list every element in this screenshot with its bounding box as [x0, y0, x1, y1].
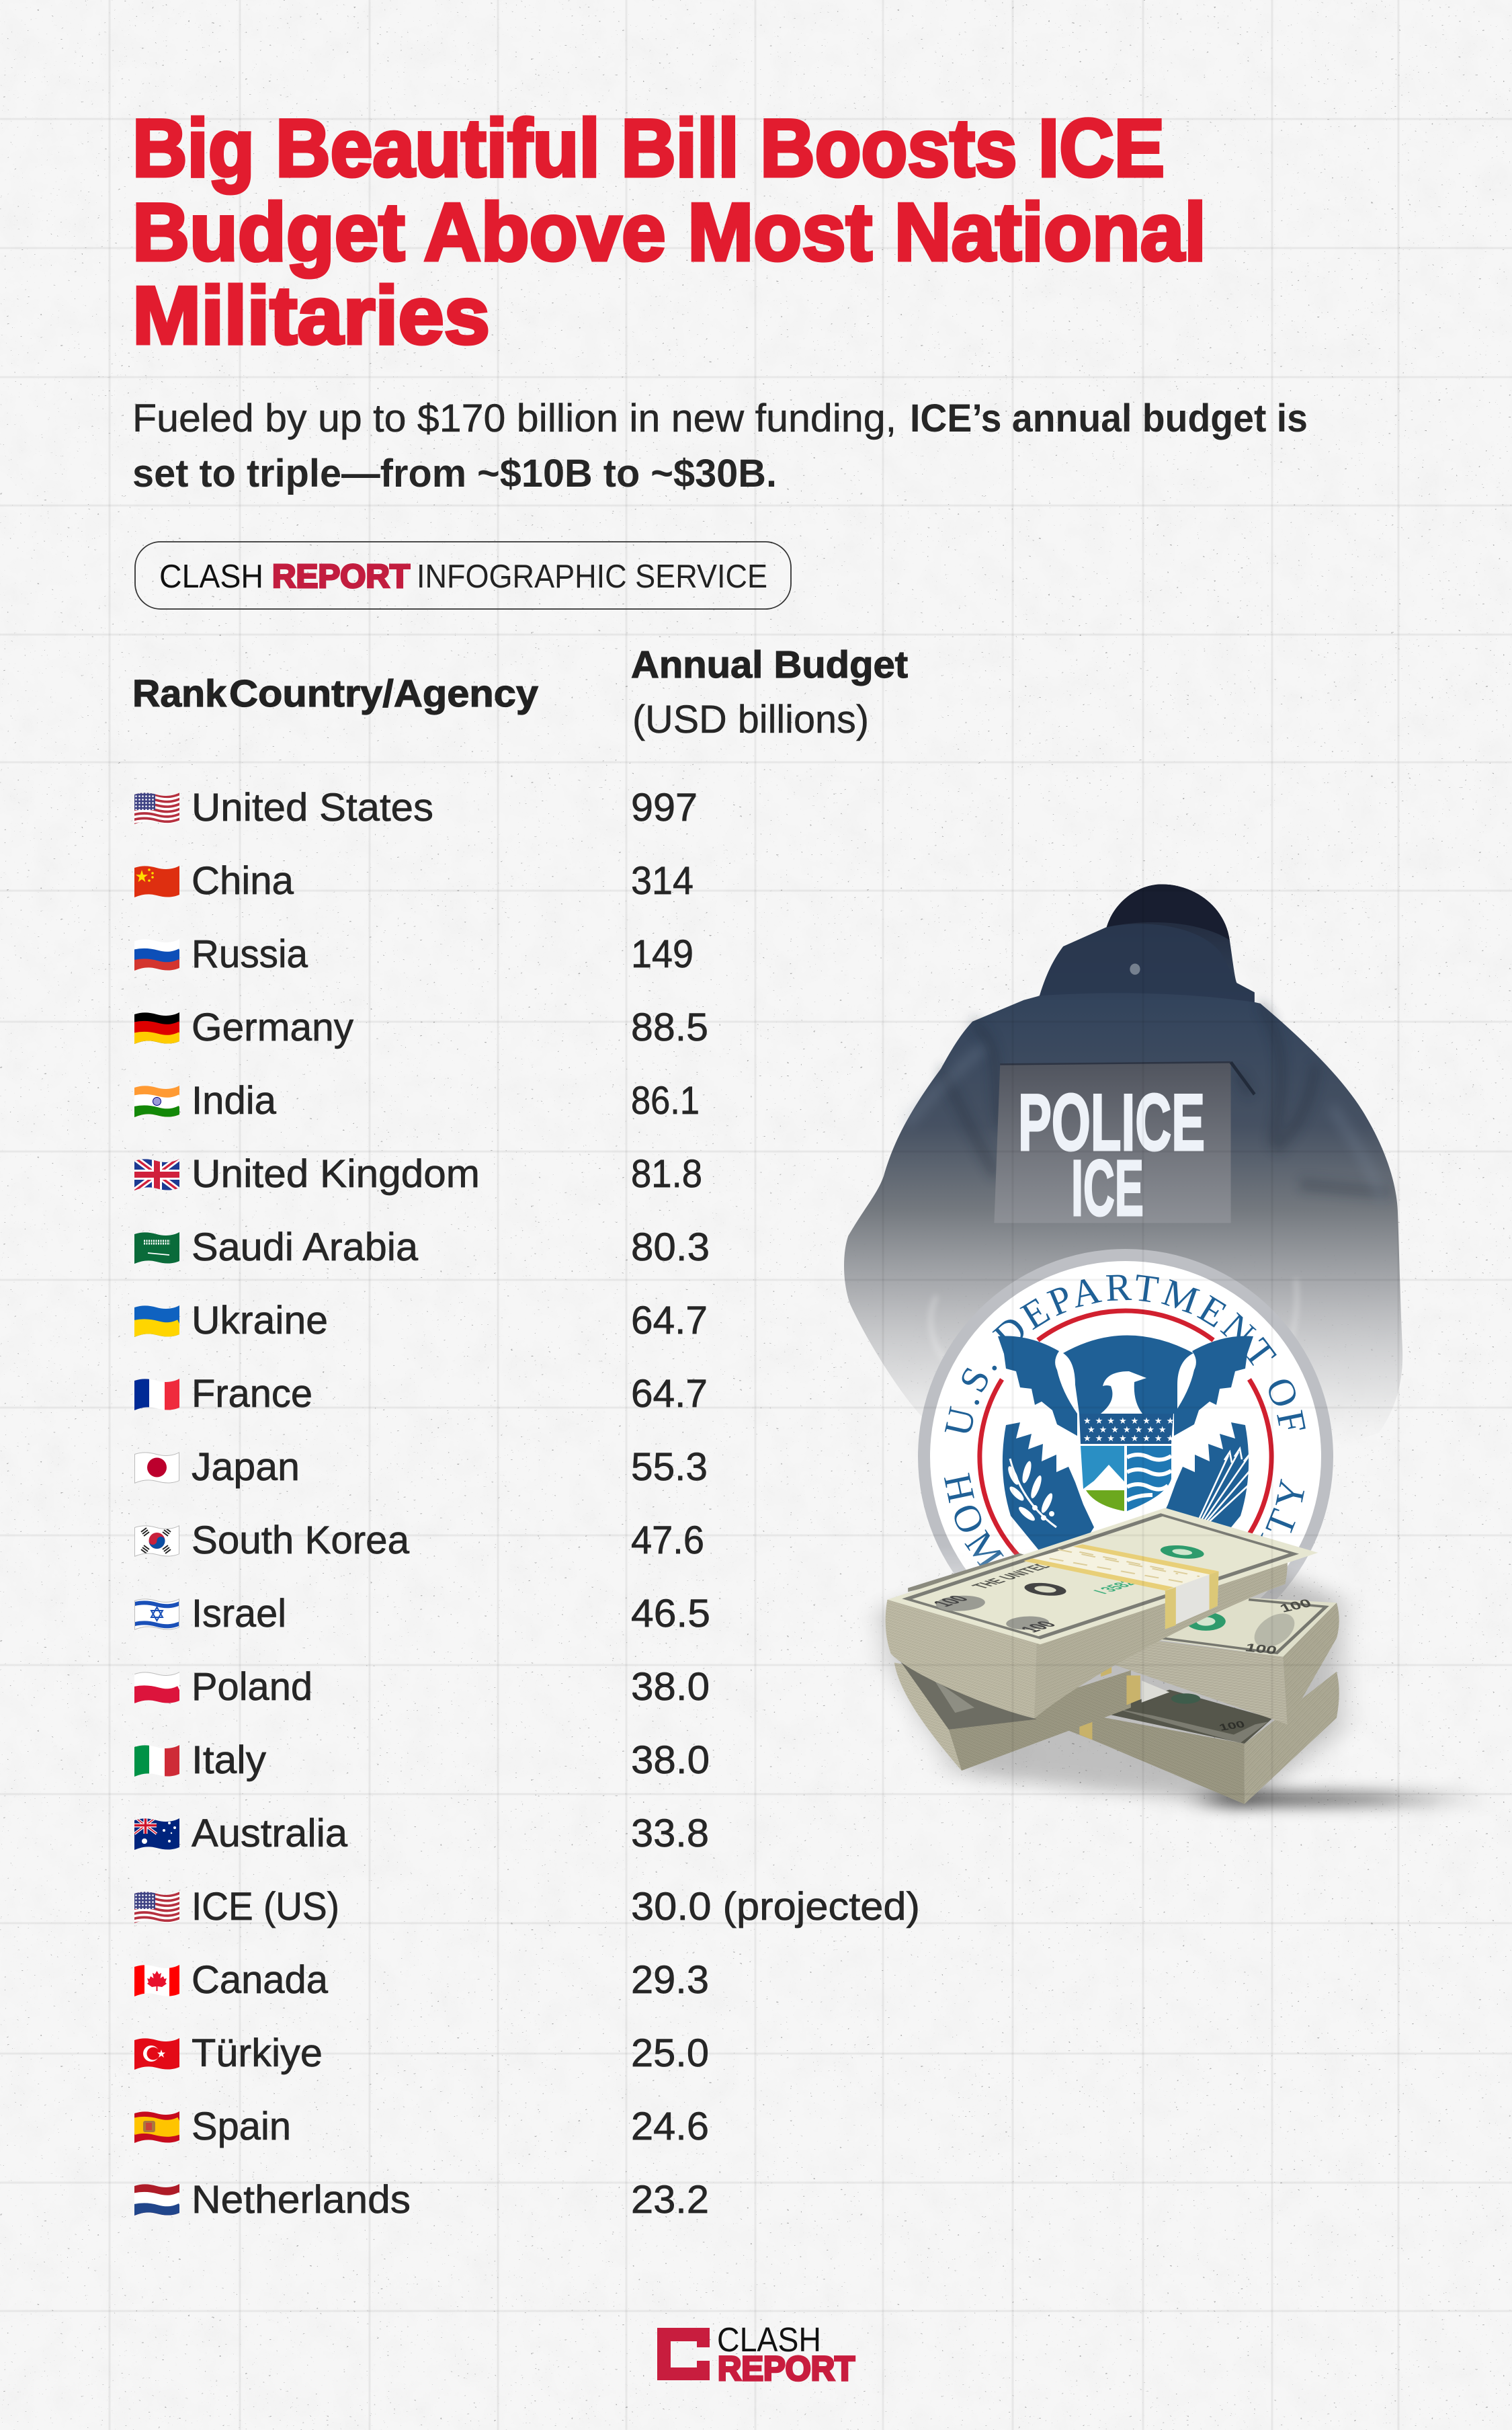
cash ground shadow: [882, 1527, 1478, 1807]
title: [132, 102, 1206, 361]
banknote face: THE UNITED: [967, 1561, 1057, 1590]
table header: [132, 643, 908, 741]
logo wordmark: REPORT: REPORT: [718, 2349, 855, 2388]
row: Saudi Arabia: 80.3: [631, 1225, 710, 1269]
row: Türkiye: Türkiye: [192, 2031, 323, 2075]
table header: Annual Budget: [631, 643, 908, 686]
flag: Poland: [132, 1670, 181, 1705]
row: Netherlands: Netherlands: [192, 2178, 411, 2222]
row: Saudi Arabia: Saudi Arabia: [192, 1225, 419, 1269]
illustration: ICE officer, DHS seal and cash stacks: [844, 885, 1470, 1818]
flag: United States (ICE): [132, 1890, 181, 1926]
row: Italy: Italy: [192, 1738, 266, 1782]
seal shield: ★★★★★★★★: [1083, 1434, 1178, 1444]
row: ICE (US): 30.0 (projected): [631, 1885, 920, 1929]
jacket text: POLICE: POLICE: [1018, 1078, 1205, 1168]
seal eagle wings: [998, 1336, 1253, 1553]
row: Netherlands: 23.2: [631, 2178, 709, 2222]
row: Russia: 149: [631, 932, 694, 976]
row: Poland: Poland: [192, 1665, 312, 1709]
banknote face: 100: [1015, 1619, 1062, 1634]
officer jacket silhouette: [844, 885, 1402, 1446]
flag: China: [134, 864, 179, 899]
row: Poland: [132, 1665, 710, 1709]
row: Netherlands: [132, 2178, 709, 2222]
row: Ukraine: 64.7: [631, 1299, 708, 1342]
row: ICE (US): [132, 1885, 920, 1929]
table header: (USD billions): [632, 698, 869, 741]
row: Poland: 38.0: [631, 1665, 710, 1709]
flag: Australia: [134, 1817, 179, 1852]
subtitle: Fueled by up to $170 billion in new funding,: [132, 397, 896, 440]
flag: Israel: [132, 1597, 181, 1632]
flag: Italy: [134, 1744, 179, 1779]
logo wordmark: CLASH: CLASH: [717, 2320, 821, 2359]
row: Australia: [134, 1812, 709, 1855]
flag: South Korea: [134, 1524, 179, 1559]
flag: Türkiye: [134, 2037, 179, 2072]
row: Spain: 24.6: [631, 2105, 709, 2148]
subtitle: set to triple—from ~$10B to ~$30B.: [132, 452, 777, 495]
flag: United States: [132, 791, 181, 827]
flag: India: [132, 1084, 181, 1119]
seal olive branch: [1006, 1459, 1056, 1527]
row: Germany: 88.5: [631, 1006, 708, 1049]
seal shield: ★★★★★★★: [1087, 1425, 1171, 1435]
flag: Netherlands: [132, 2183, 181, 2218]
row: Ukraine: [132, 1299, 708, 1342]
row: India: India: [192, 1079, 277, 1123]
badge: Clash Report infographic service: INFOGRAPHIC SERVICE: [417, 559, 767, 595]
flag: Germany: [132, 1011, 181, 1046]
row: ICE (US): ICE (US): [192, 1885, 339, 1929]
row: India: [132, 1079, 700, 1123]
seal arrows: [1198, 1449, 1258, 1523]
row: Ukraine: Ukraine: [192, 1299, 328, 1342]
row: Russia: Russia: [192, 932, 308, 976]
flag: Spain: [132, 2110, 181, 2145]
row: India: 86.1: [631, 1079, 700, 1123]
stack: foreground: [886, 1508, 1318, 1718]
badge: Clash Report infographic service: [135, 542, 791, 609]
row: Türkiye: 25.0: [631, 2031, 709, 2075]
row: China: 314: [631, 859, 694, 903]
row: Germany: [132, 1006, 708, 1049]
row: China: China: [192, 859, 294, 903]
logo mark: [657, 2328, 710, 2380]
row: United Kingdom: United Kingdom: [192, 1152, 480, 1196]
badge: Clash Report infographic service: CLASH: [159, 559, 263, 595]
jacket text: ICE: ICE: [1071, 1144, 1144, 1233]
row: South Korea: 47.6: [631, 1518, 704, 1562]
flag: Japan: [134, 1451, 179, 1486]
row: Japan: 55.3: [631, 1445, 708, 1489]
stack: right: 100: [1244, 1641, 1278, 1657]
row: Canada: [134, 1958, 709, 2002]
title: Militaries: [132, 270, 490, 361]
stack: lower right: 100: [1218, 1719, 1247, 1733]
row: Germany: Germany: [192, 1006, 353, 1049]
row: Japan: Japan: [192, 1445, 300, 1489]
flag: Ukraine: [132, 1304, 181, 1339]
subtitle: ICE’s annual budget is: [910, 397, 1308, 440]
row: Australia: 33.8: [631, 1812, 709, 1855]
banknote face: I 358271537 A: [1089, 1564, 1185, 1595]
stack: lower right: [1062, 1672, 1339, 1804]
stack: right: [1111, 1596, 1339, 1724]
row: France: France: [192, 1372, 312, 1416]
title: Big Beautiful Bill Boosts ICE: [132, 102, 1165, 194]
money band: [1023, 1546, 1219, 1590]
row: Saudi Arabia: [134, 1225, 710, 1269]
banknote face: 100: [927, 1594, 974, 1609]
row: United Kingdom: 81.8: [631, 1152, 702, 1196]
flag: France: [134, 1377, 179, 1412]
row: Israel: [132, 1592, 710, 1635]
badge: Clash Report infographic service: REPORT: [272, 559, 410, 595]
row: Türkiye: [134, 2031, 709, 2075]
jacket patch: [994, 1062, 1231, 1223]
seal shield: [1079, 1414, 1178, 1511]
stack: right: 100: [1277, 1596, 1314, 1615]
seal eagle dome and head: [1063, 1335, 1193, 1414]
row: United States: 997: [631, 786, 698, 829]
row: Canada: 29.3: [631, 1958, 709, 2002]
row: United States: United States: [192, 786, 433, 829]
row: Italy: [134, 1738, 710, 1782]
seal red ring: [980, 1311, 1271, 1568]
row: Russia: [132, 932, 694, 976]
seal lettering: bottom: HOMELAND SECURITY: [943, 1472, 1305, 1566]
flag: United Kingdom: [134, 1158, 179, 1192]
row: Canada: Canada: [192, 1958, 329, 2002]
cash stacks: [886, 1508, 1339, 1804]
row: Israel: Israel: [192, 1592, 286, 1635]
row: Japan: [134, 1445, 708, 1489]
footer logo: Clash Report: [657, 2320, 855, 2388]
row: United Kingdom: [134, 1152, 702, 1196]
table header: Country/Agency: [229, 672, 538, 715]
row: Israel: 46.5: [631, 1592, 710, 1635]
row: United States: [132, 786, 698, 829]
seal lettering: top: U.S. DEPARTMENT OF: [945, 1274, 1306, 1433]
flag: Saudi Arabia: [134, 1231, 179, 1266]
stack: lower left: [894, 1660, 1169, 1771]
subtitle: [132, 397, 1308, 495]
row: Australia: Australia: [192, 1812, 348, 1855]
table header: Rank: [132, 672, 226, 715]
row: Spain: Spain: [192, 2105, 291, 2148]
row: China: [134, 859, 694, 903]
row: France: [134, 1372, 708, 1416]
title: Budget Above Most National: [132, 186, 1206, 278]
flag: Canada: [134, 1963, 179, 1998]
row: South Korea: South Korea: [192, 1518, 410, 1562]
row: Spain: [132, 2105, 709, 2148]
flag: Russia: [132, 938, 181, 973]
row: South Korea: [134, 1518, 704, 1562]
seal shield: ★★★★★★★★: [1083, 1416, 1178, 1426]
banknote face: [888, 1508, 1318, 1644]
DHS seal: [918, 1249, 1333, 1599]
row: France: 64.7: [631, 1372, 708, 1416]
row: Italy: 38.0: [631, 1738, 710, 1782]
